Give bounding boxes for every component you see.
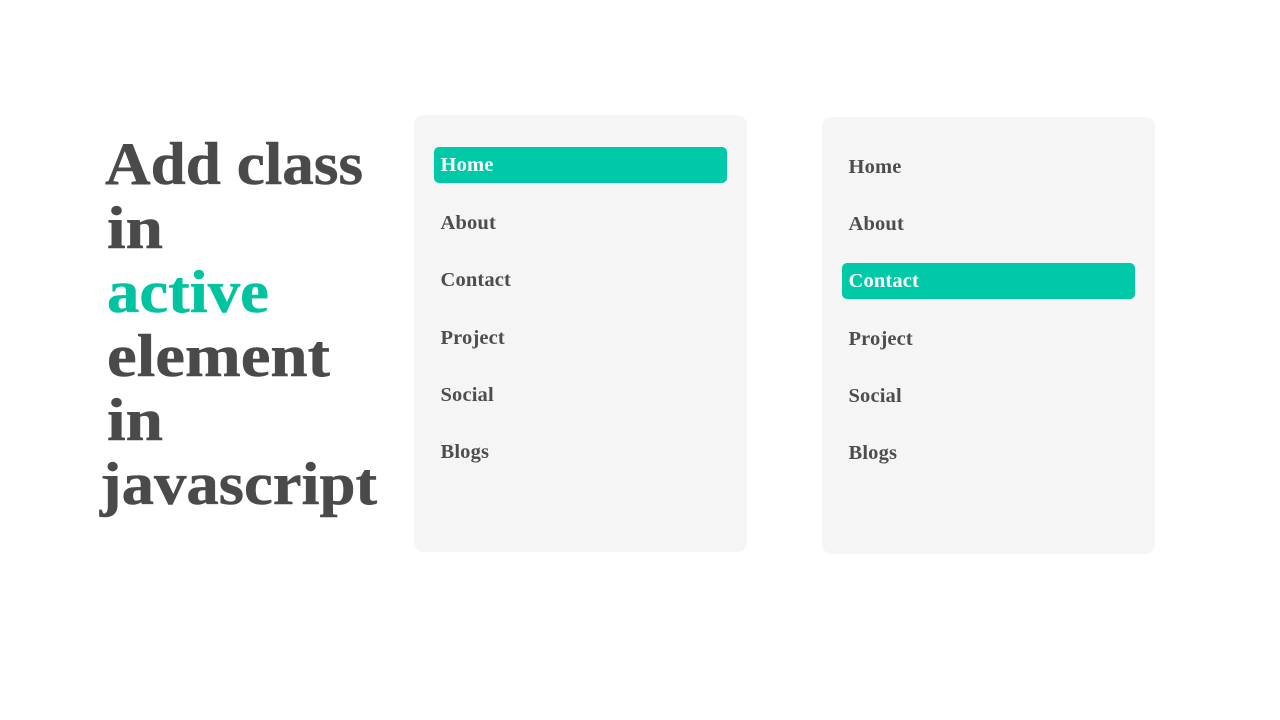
menu item: About: About	[848, 213, 904, 235]
menu item: Project: Project	[440, 326, 505, 348]
active highlight: Home	[434, 147, 727, 183]
title line: Add class: Add class	[105, 131, 363, 197]
menu item: Blogs: Blogs	[440, 441, 489, 463]
menu item: Contact: Contact	[848, 270, 919, 292]
panel: menu with Contact active	[822, 117, 1155, 554]
menu item: Social: Social	[848, 385, 902, 407]
menu item: Home: Home	[440, 154, 493, 176]
title line: javascript: javascript	[100, 451, 377, 517]
active highlight: Contact	[842, 263, 1135, 299]
menu item: Home: Home	[848, 156, 901, 178]
title line: in: in	[107, 387, 163, 453]
menu item: Blogs: Blogs	[848, 442, 897, 464]
title line: element: element	[107, 323, 330, 389]
menu item: Project: Project	[848, 328, 913, 350]
title	[99, 131, 378, 518]
title line: in: in	[107, 195, 163, 261]
menu item: Contact: Contact	[440, 269, 511, 291]
panel: menu with Home active	[414, 115, 747, 552]
menu item: Social: Social	[440, 384, 494, 406]
menu item: About: About	[440, 212, 496, 234]
title line: active: active	[107, 259, 269, 325]
